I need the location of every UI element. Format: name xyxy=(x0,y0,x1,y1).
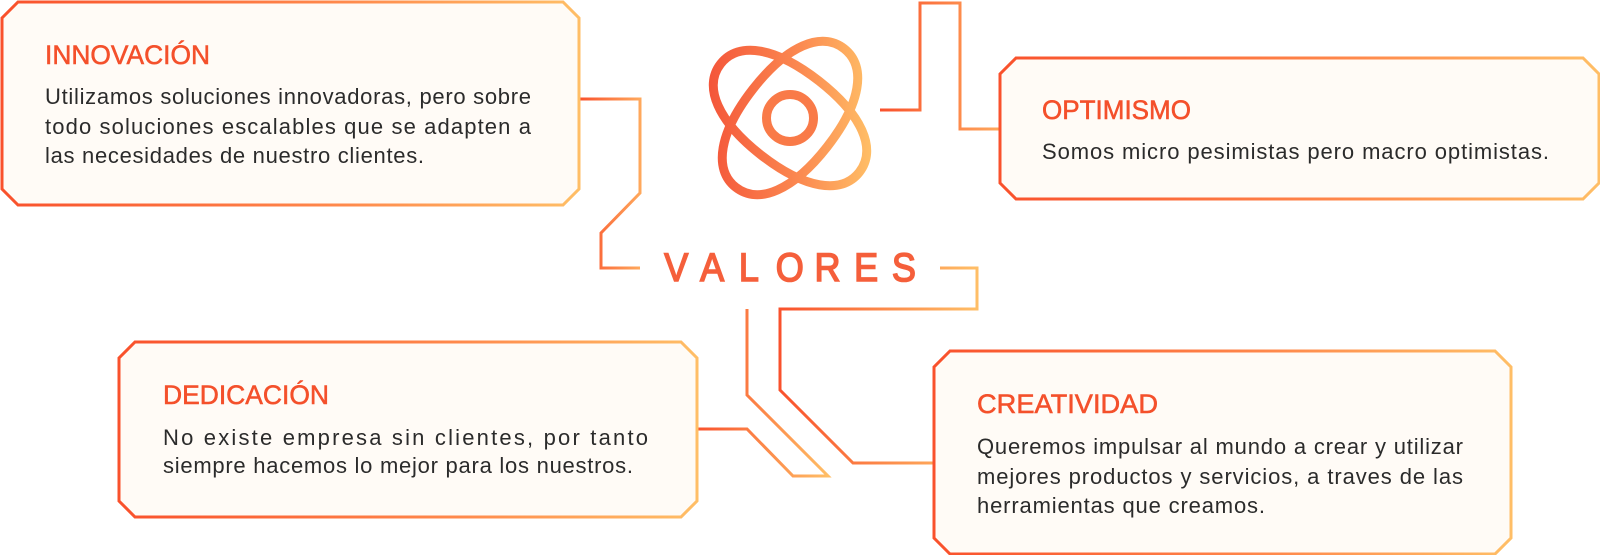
title: valores: VALORES xyxy=(664,246,916,290)
connector: atom icon to optimismo xyxy=(880,3,1000,129)
text block: creatividad xyxy=(977,434,1463,518)
text block: dedicación: No existe empresa sin clientes, por tanto xyxy=(163,425,648,450)
heading: innovación: INNOVACIÓN xyxy=(45,39,210,70)
heading: dedicación: DEDICACIÓN xyxy=(163,379,329,410)
text block: creatividad: herramientas que creamos. xyxy=(977,493,1265,518)
panel: innovación xyxy=(2,2,579,205)
connector: valores to creatividad xyxy=(780,268,977,463)
text block: innovación: todo soluciones escalables que se adapten a xyxy=(45,114,532,139)
icon: atom xyxy=(692,20,888,216)
text block: creatividad: Queremos impulsar al mundo a crear y utilizar xyxy=(977,434,1463,459)
text block: dedicación: siempre hacemos lo mejor para los nuestros. xyxy=(163,453,633,478)
text block: optimismo: Somos micro pesimistas pero macro optimistas. xyxy=(1042,139,1549,164)
panel: optimismo xyxy=(1000,58,1599,199)
heading: creatividad: CREATIVIDAD xyxy=(977,389,1158,419)
text block: innovación xyxy=(45,84,532,168)
text block: dedicación xyxy=(163,425,648,478)
text block: innovación: Utilizamos soluciones innovadoras, pero sobre xyxy=(45,84,531,109)
connector: valores to dedicación xyxy=(697,309,828,476)
heading: optimismo: OPTIMISMO xyxy=(1042,95,1191,125)
connector: innovación to valores xyxy=(580,99,640,268)
text block: innovación: las necesidades de nuestro clientes. xyxy=(45,143,424,168)
panel: dedicación xyxy=(119,342,697,517)
panel: creatividad xyxy=(934,351,1511,554)
text block: creatividad: mejores productos y servicios, a traves de las xyxy=(977,464,1463,489)
